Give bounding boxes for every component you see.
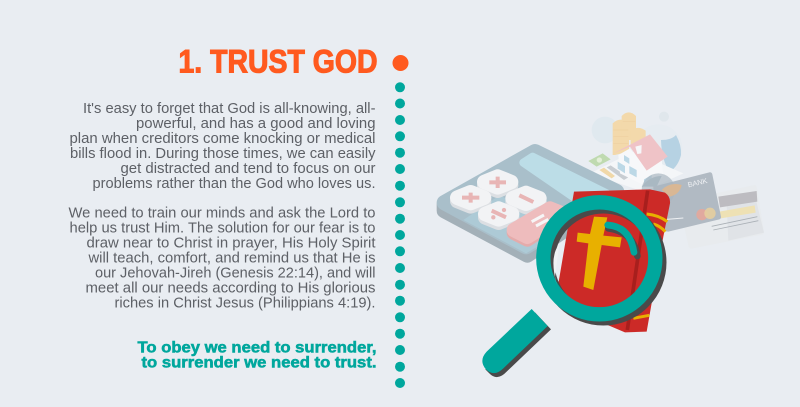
callout: quote: To obey we need to surrender, — [138, 340, 376, 356]
text block: second paragraph: draw near to Christ in prayer, His Holy Spirit — [86, 234, 376, 252]
callout: quote — [138, 340, 376, 372]
icon: calculator — [444, 152, 617, 255]
text block: first paragraph: get distracted and tend to focus on our — [120, 160, 376, 177]
text block: first paragraph: bills flood in. During those times, we can easily — [70, 145, 376, 162]
icon: bank cards — [642, 172, 764, 249]
text block: second paragraph: meet all our needs according to His glorious — [86, 280, 376, 296]
text block: first paragraph: plan when creditors come knocking or medical — [70, 130, 376, 147]
text block: second paragraph: our Jehovah-Jireh (Genesis 22:14), and will — [95, 264, 376, 282]
timeline: orange marker — [392, 55, 408, 71]
icon: bible — [555, 189, 670, 332]
text block: first paragraph: It's easy to forget that God is all-knowing, all- — [83, 100, 376, 117]
text block: second paragraph — [68, 204, 376, 312]
icon: bank cards: BANK — [687, 176, 708, 189]
illustration — [444, 112, 764, 377]
text block: second paragraph: help us trust Him. The solution for our fear is to — [70, 220, 376, 236]
text block: second paragraph: We need to train our minds and ask the Lord to — [68, 204, 376, 222]
icon: house and coins — [588, 112, 683, 192]
text block: first paragraph — [70, 100, 376, 192]
text block: second paragraph: riches in Christ Jesus (Philippians 4:19). — [114, 294, 376, 312]
icon: magnifying glass — [482, 202, 659, 377]
text block: first paragraph: powerful, and has a good and loving — [136, 115, 376, 132]
timeline: dotted line — [395, 82, 405, 388]
callout: quote: to surrender we need to trust. — [142, 354, 376, 372]
text block: first paragraph: problems rather than the God who loves us. — [92, 175, 376, 192]
text block: second paragraph: will teach, comfort, and remind us that He is — [88, 250, 376, 266]
icon: cross — [577, 217, 622, 290]
title: 1. TRUST GOD — [178, 44, 378, 80]
